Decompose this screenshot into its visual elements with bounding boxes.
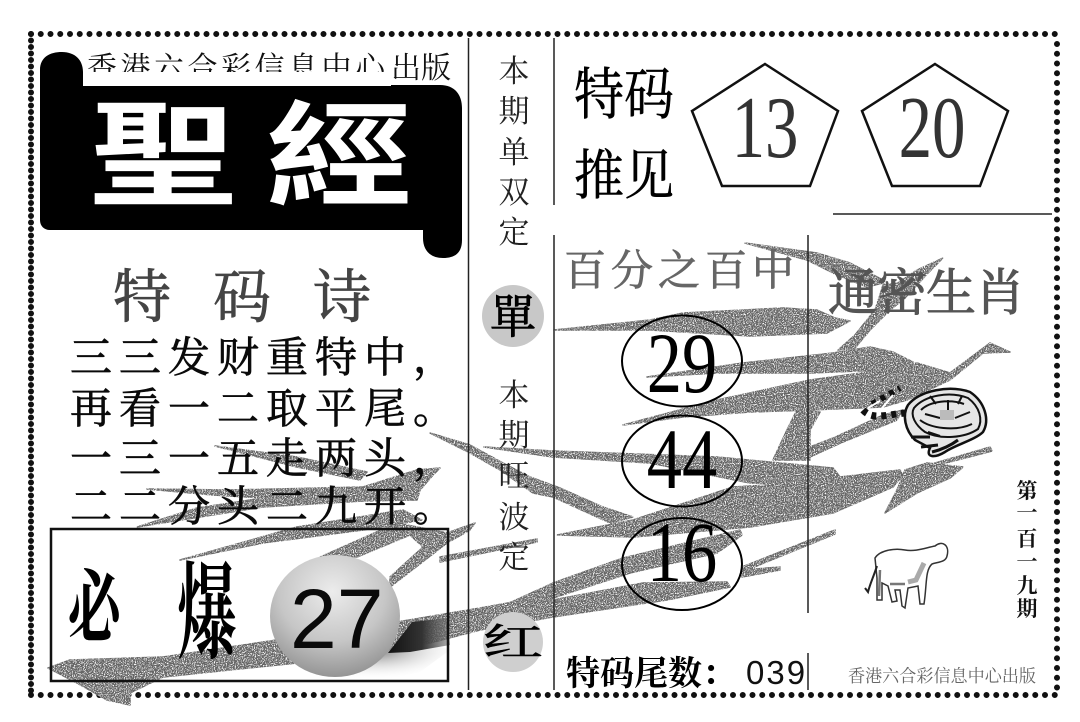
- bamboo: upper leaves: [554, 308, 850, 336]
- poem text: [70, 335, 462, 531]
- tiger tail: [863, 410, 905, 416]
- pentagon 13: [692, 64, 838, 186]
- issue number vertical: 一: [1016, 501, 1038, 525]
- issue number vertical: [1016, 479, 1038, 621]
- issue number vertical: 第: [1016, 479, 1038, 503]
- poem text: 一三一五走两头，: [70, 437, 462, 483]
- poem heading: 特码诗: [113, 265, 413, 330]
- column text: single or double: 双: [498, 175, 530, 210]
- bamboo: right thin stems: [742, 530, 835, 572]
- bamboo: main lower stem: [48, 582, 730, 705]
- poem text: 二二分头二九开。: [70, 485, 462, 531]
- vertical rule: right column: [807, 235, 809, 613]
- bamboo: right pointed leaf: [885, 463, 963, 513]
- column text: single or double: 定: [498, 215, 530, 250]
- special code heading: [574, 65, 674, 206]
- circled number 44: [622, 413, 742, 508]
- badge: red: 红: [483, 621, 543, 663]
- column text: single or double: [498, 54, 530, 250]
- column text: wave colour: [498, 378, 530, 575]
- special code heading: 推见: [574, 147, 674, 206]
- icon: ox: [865, 543, 948, 608]
- column text: wave colour: 期: [498, 418, 530, 453]
- issue number vertical: 一: [1016, 550, 1038, 574]
- badge: red: [483, 612, 543, 672]
- title banner scroll: [40, 52, 462, 258]
- publisher line: 香港六合彩信息中心: [87, 52, 386, 85]
- issue number vertical: 九: [1016, 574, 1038, 598]
- vertical rule: middle column bottom: [553, 235, 555, 690]
- pentagon 13: 13: [732, 78, 798, 176]
- column text: single or double: 单: [498, 135, 530, 170]
- poem text: 再看一二取平尾。: [70, 387, 462, 433]
- column text: wave colour: 波: [498, 500, 530, 535]
- circled number 29: [622, 316, 742, 412]
- big label: 必: [68, 564, 125, 654]
- badge: single: 單: [490, 291, 536, 343]
- horizontal rule: [833, 213, 1052, 215]
- bamboo: diagonal branch: [430, 433, 633, 523]
- slogan: grey: 百分之百中: [564, 249, 799, 295]
- footer publisher: 香港六合彩信息中心出版: [848, 666, 1036, 686]
- vertical rule: middle column top: [553, 38, 555, 205]
- must-win box: [51, 529, 448, 681]
- issue number vertical: 百: [1016, 527, 1038, 551]
- vertical rule: left column: [468, 38, 470, 690]
- title text: 聖經: [90, 92, 412, 220]
- circled number 44: 44: [647, 413, 717, 508]
- bamboo illustration: [48, 243, 1010, 705]
- publisher line: 出版: [391, 52, 451, 85]
- special code heading: 特码: [574, 65, 674, 127]
- issue number vertical: 期: [1016, 597, 1038, 621]
- column text: single or double: 期: [498, 94, 530, 129]
- poem text: 三三发财重特中，: [70, 335, 462, 382]
- tail digits: 039: [746, 654, 807, 691]
- column text: single or double: 本: [498, 54, 530, 89]
- pentagon 20: 20: [899, 78, 965, 176]
- bamboo: top leaf and trunk: [745, 243, 887, 287]
- bamboo: long middle leaves: [484, 447, 903, 485]
- slogan: secret zodiac: 通密生肖: [828, 265, 1024, 321]
- column text: wave colour: 本: [498, 378, 530, 413]
- special tail label: 特码尾数：: [566, 655, 736, 693]
- publisher line: [83, 46, 451, 86]
- icon: tiger: [863, 388, 986, 456]
- badge: single: [482, 285, 544, 347]
- pentagon 20: [862, 64, 1008, 186]
- column text: wave colour: 旺: [498, 459, 530, 494]
- circled number 29: 29: [647, 317, 717, 412]
- circled number 16: 16: [647, 506, 717, 601]
- ball shadow: [300, 618, 450, 690]
- must-win box: 爆: [176, 557, 237, 673]
- circled number 16: [622, 506, 742, 610]
- column text: wave colour: 定: [498, 540, 530, 575]
- ball with number 27: 27: [290, 572, 383, 666]
- vertical rule: tail number: [807, 653, 809, 690]
- ball with number 27: [270, 555, 400, 677]
- bamboo: upper stem: [505, 530, 742, 610]
- bamboo: upper left leaves: [215, 446, 367, 480]
